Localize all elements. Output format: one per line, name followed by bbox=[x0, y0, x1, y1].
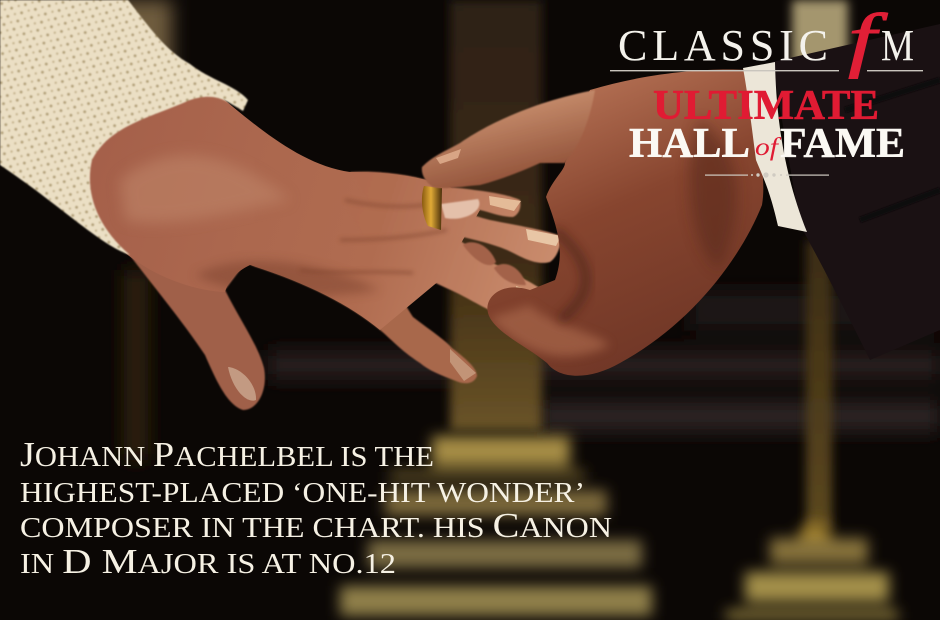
caption text: JOHANN PACHELBEL IS THE bbox=[20, 435, 434, 474]
little finger bbox=[250, 265, 477, 383]
white shirt cuff bbox=[743, 62, 807, 232]
wordmark: Classic FM bbox=[610, 0, 923, 79]
finger creases bbox=[300, 200, 447, 273]
heading: Hall of Fame: FAME bbox=[780, 121, 905, 167]
heading: Hall of Fame bbox=[629, 121, 905, 167]
caption text: COMPOSER IN THE CHART. HIS CANON bbox=[20, 506, 612, 545]
caption text bbox=[20, 435, 612, 581]
wordmark: Classic FM: f bbox=[848, 0, 889, 79]
light fingertip side bbox=[441, 199, 479, 219]
jacket folds bbox=[845, 80, 940, 220]
caption text: IN D M AJOR IS AT NO.12 bbox=[20, 542, 396, 581]
thumb bbox=[108, 200, 265, 410]
jacket sleeve bbox=[772, 24, 940, 360]
heading: Hall of Fame: HALL bbox=[629, 121, 750, 167]
lace sleeve bbox=[0, 0, 248, 255]
wordmark: Classic FM: M bbox=[881, 21, 914, 70]
decorative rule with dots bbox=[705, 172, 829, 178]
ring finger bbox=[350, 172, 521, 217]
logo: Classic FM Ultimate Hall of Fame bbox=[610, 0, 923, 178]
wordmark: Classic FM: CLASSIC bbox=[618, 21, 828, 70]
supporting fingertips bbox=[463, 242, 526, 285]
third finger bbox=[340, 213, 551, 321]
index nail bbox=[436, 149, 461, 164]
wedding ring bbox=[422, 186, 442, 230]
middle finger bbox=[345, 202, 561, 263]
hand body bbox=[88, 96, 480, 330]
palm bbox=[487, 70, 764, 376]
caption text: HIGHEST-PLACED ‘ONE-HIT WONDER’ bbox=[20, 478, 585, 509]
nails bbox=[228, 196, 561, 401]
centre steps bbox=[432, 436, 570, 466]
index finger bbox=[422, 90, 595, 188]
heading: Ultimate: ULTIMATE bbox=[653, 83, 879, 129]
man's hand and sleeve bbox=[422, 24, 940, 390]
right steps bbox=[799, 523, 831, 549]
heading: Hall of Fame: of bbox=[755, 134, 782, 161]
woman's arm and hand bbox=[0, 0, 561, 410]
